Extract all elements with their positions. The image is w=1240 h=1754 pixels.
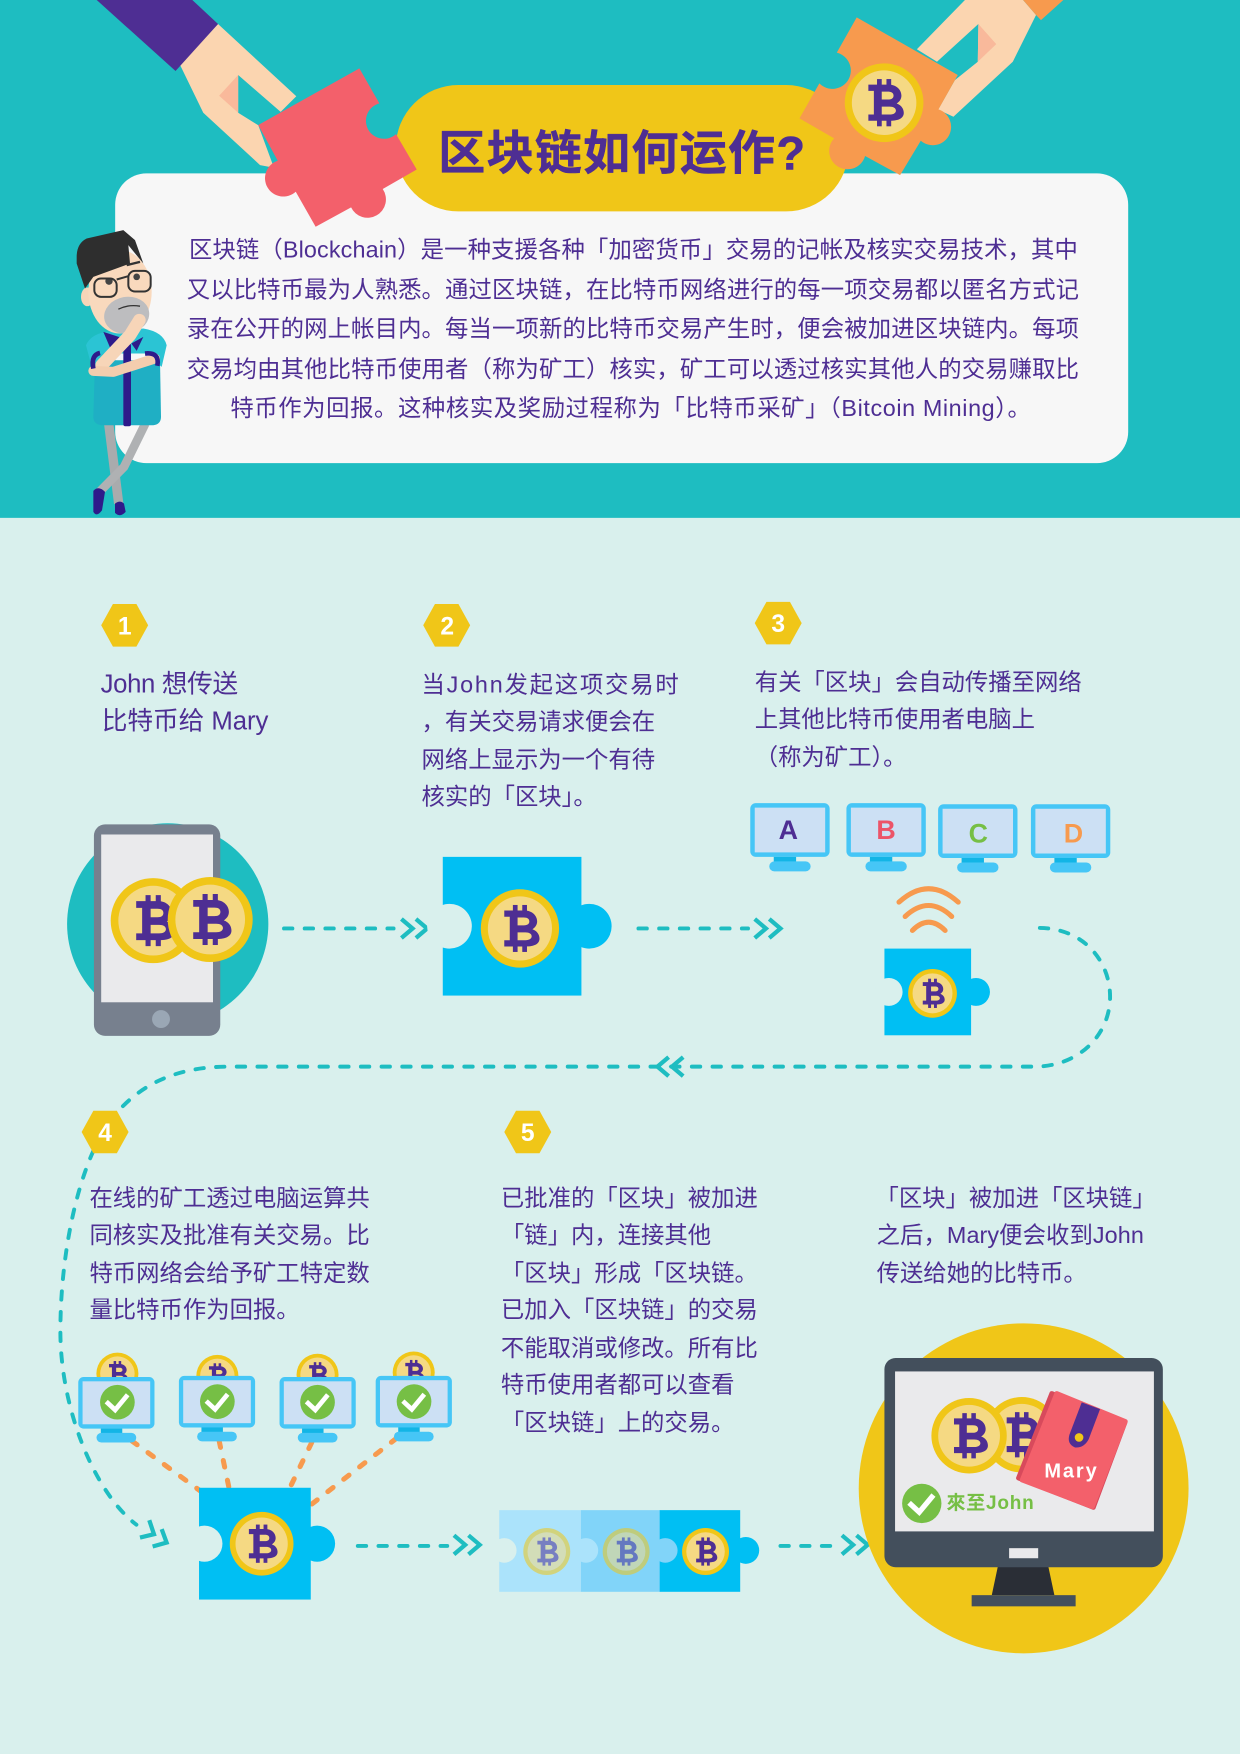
icon: desktop receiving bitcoin in Mary's wallet — [859, 1323, 1189, 1653]
icon: chain of three blocks — [492, 1510, 759, 1592]
step 3 text: （称为矿工）。 — [755, 744, 907, 770]
wallet — [1018, 1393, 1125, 1507]
final text: 传送给她的比特币。 — [877, 1260, 1087, 1286]
step 4 text: 同核实及批准有关交易。比 — [89, 1222, 370, 1248]
final text — [875, 1185, 1156, 1286]
step 2 text: 当John发起这项交易时 — [422, 671, 679, 697]
intro text: 区块链（Blockchain）是一种支援各种「加密货币」交易的记帐及核实交易技术，其中 — [189, 236, 1078, 262]
icon: small bitcoin puzzle block — [875, 949, 990, 1035]
step 4 badge: 4 — [98, 1120, 112, 1147]
icon: miner computer C — [938, 804, 1017, 873]
icon: miner computer 2 verified — [179, 1355, 255, 1441]
icon: miner computer D: D — [1064, 818, 1083, 848]
arrow: block to chain — [358, 1535, 480, 1554]
step 1 badge — [101, 604, 148, 647]
step 2 badge — [423, 604, 470, 647]
connectors: miners to block — [132, 1438, 397, 1504]
received label: 來至John — [946, 1492, 1034, 1514]
title pill — [396, 85, 849, 211]
panel: introduction card — [115, 173, 1128, 463]
intro text: 特币作为回报。这种核实及奖励过程称为「比特币采矿」（Bitcoin Mining）。 — [230, 395, 1031, 421]
background: light lower section — [0, 518, 1240, 1754]
step 1 text — [101, 669, 268, 735]
icon: broadcast signal — [899, 889, 958, 930]
step 4 text — [89, 1185, 370, 1323]
icon: orange bitcoin puzzle piece — [799, 17, 958, 175]
step 5 text: 「区块链」上的交易。 — [501, 1410, 734, 1436]
step 5 text: 不能取消或修改。所有比 — [501, 1335, 758, 1361]
arrow: step 2 to 3 — [638, 919, 780, 938]
arrow: long dashed path from step 3 to step 4 — [60, 928, 1110, 1546]
step 5 text: 「区块」形成「区块链。 — [501, 1260, 758, 1286]
icon: miner computer D — [1031, 804, 1110, 873]
step 4 badge — [82, 1111, 129, 1153]
intro text: 录在公开的网上帐目内。每当一项新的比特币交易产生时，便会被加进区块链内。每项 — [187, 316, 1079, 342]
step 2 badge: 2 — [440, 613, 454, 640]
step 4 text: 在线的矿工透过电脑运算共 — [89, 1185, 370, 1211]
background: teal header band — [0, 0, 1240, 518]
step 3 text: 有关「区块」会自动传播至网络 — [755, 669, 1082, 695]
intro text — [187, 236, 1079, 421]
step 2 text: 网络上显示为一个有待 — [422, 746, 655, 772]
step 2 text: 核实的「区块」。 — [422, 783, 597, 809]
step 4 text: 量比特币作为回报。 — [89, 1297, 300, 1323]
step 5 text: 已批准的「区块」被加进 — [501, 1185, 758, 1211]
wallet label: Mary — [1044, 1460, 1098, 1482]
intro text: 交易均由其他比特币使用者（称为矿工）核实，矿工可以透过核实其他人的交易赚取比 — [187, 356, 1079, 382]
character: thinking man — [77, 230, 167, 515]
step 4 text: 特币网络会给予矿工特定数 — [89, 1260, 370, 1286]
icon: bitcoin puzzle block — [427, 857, 612, 996]
step 1 text: 比特币给 Mary — [102, 706, 268, 735]
icon: miner computer 4 verified — [376, 1352, 452, 1441]
intro text: 又以比特币最为人熟悉。通过区块链，在比特币网络进行的每一项交易都以匿名方式记 — [187, 277, 1079, 303]
icon: miner computer 3 verified — [280, 1354, 356, 1443]
step 3 text — [755, 669, 1082, 770]
icon: left hand with purple sleeve — [97, 0, 296, 168]
icon: right hand with orange sleeve — [917, 0, 1063, 117]
step 5 text: 已加入「区块链」的交易 — [501, 1297, 758, 1323]
icon: red puzzle piece — [258, 68, 417, 227]
arrow: chain to Mary — [780, 1535, 868, 1554]
icon: miner computer 1 verified — [78, 1353, 154, 1443]
step 1 badge: 1 — [118, 613, 132, 640]
icon: miner computer B — [846, 803, 926, 871]
final text: 之后，Mary便会收到John — [877, 1222, 1144, 1248]
step 5 text: 特币使用者都可以查看 — [501, 1372, 734, 1398]
step 2 text — [422, 671, 679, 809]
step 3 text: 上其他比特币使用者电脑上 — [755, 706, 1035, 732]
arrow: step 1 to 2 — [284, 919, 427, 938]
icon: verified bitcoin block — [186, 1488, 335, 1600]
icon: phone with two bitcoins — [67, 823, 268, 1036]
step 3 badge — [755, 602, 802, 644]
step 3 badge: 3 — [771, 611, 785, 638]
step 2 text: ，有关交易请求便会在 — [422, 708, 655, 734]
step 5 text — [501, 1185, 758, 1436]
step 5 badge — [504, 1111, 551, 1153]
title: 区块链如何运作? — [438, 126, 805, 179]
icon: miner computer B: B — [876, 815, 896, 845]
step 5 text: 「链」内，连接其他 — [501, 1222, 711, 1248]
step 1 text: John 想传送 — [101, 669, 238, 698]
icon: miner computer A — [750, 803, 830, 871]
icon: received check — [902, 1484, 941, 1523]
icon: miner computer C: C — [969, 818, 988, 848]
step 5 badge: 5 — [521, 1120, 535, 1147]
icon: miner computer A: A — [779, 815, 798, 845]
final text: 「区块」被加进「区块链」 — [875, 1185, 1156, 1211]
